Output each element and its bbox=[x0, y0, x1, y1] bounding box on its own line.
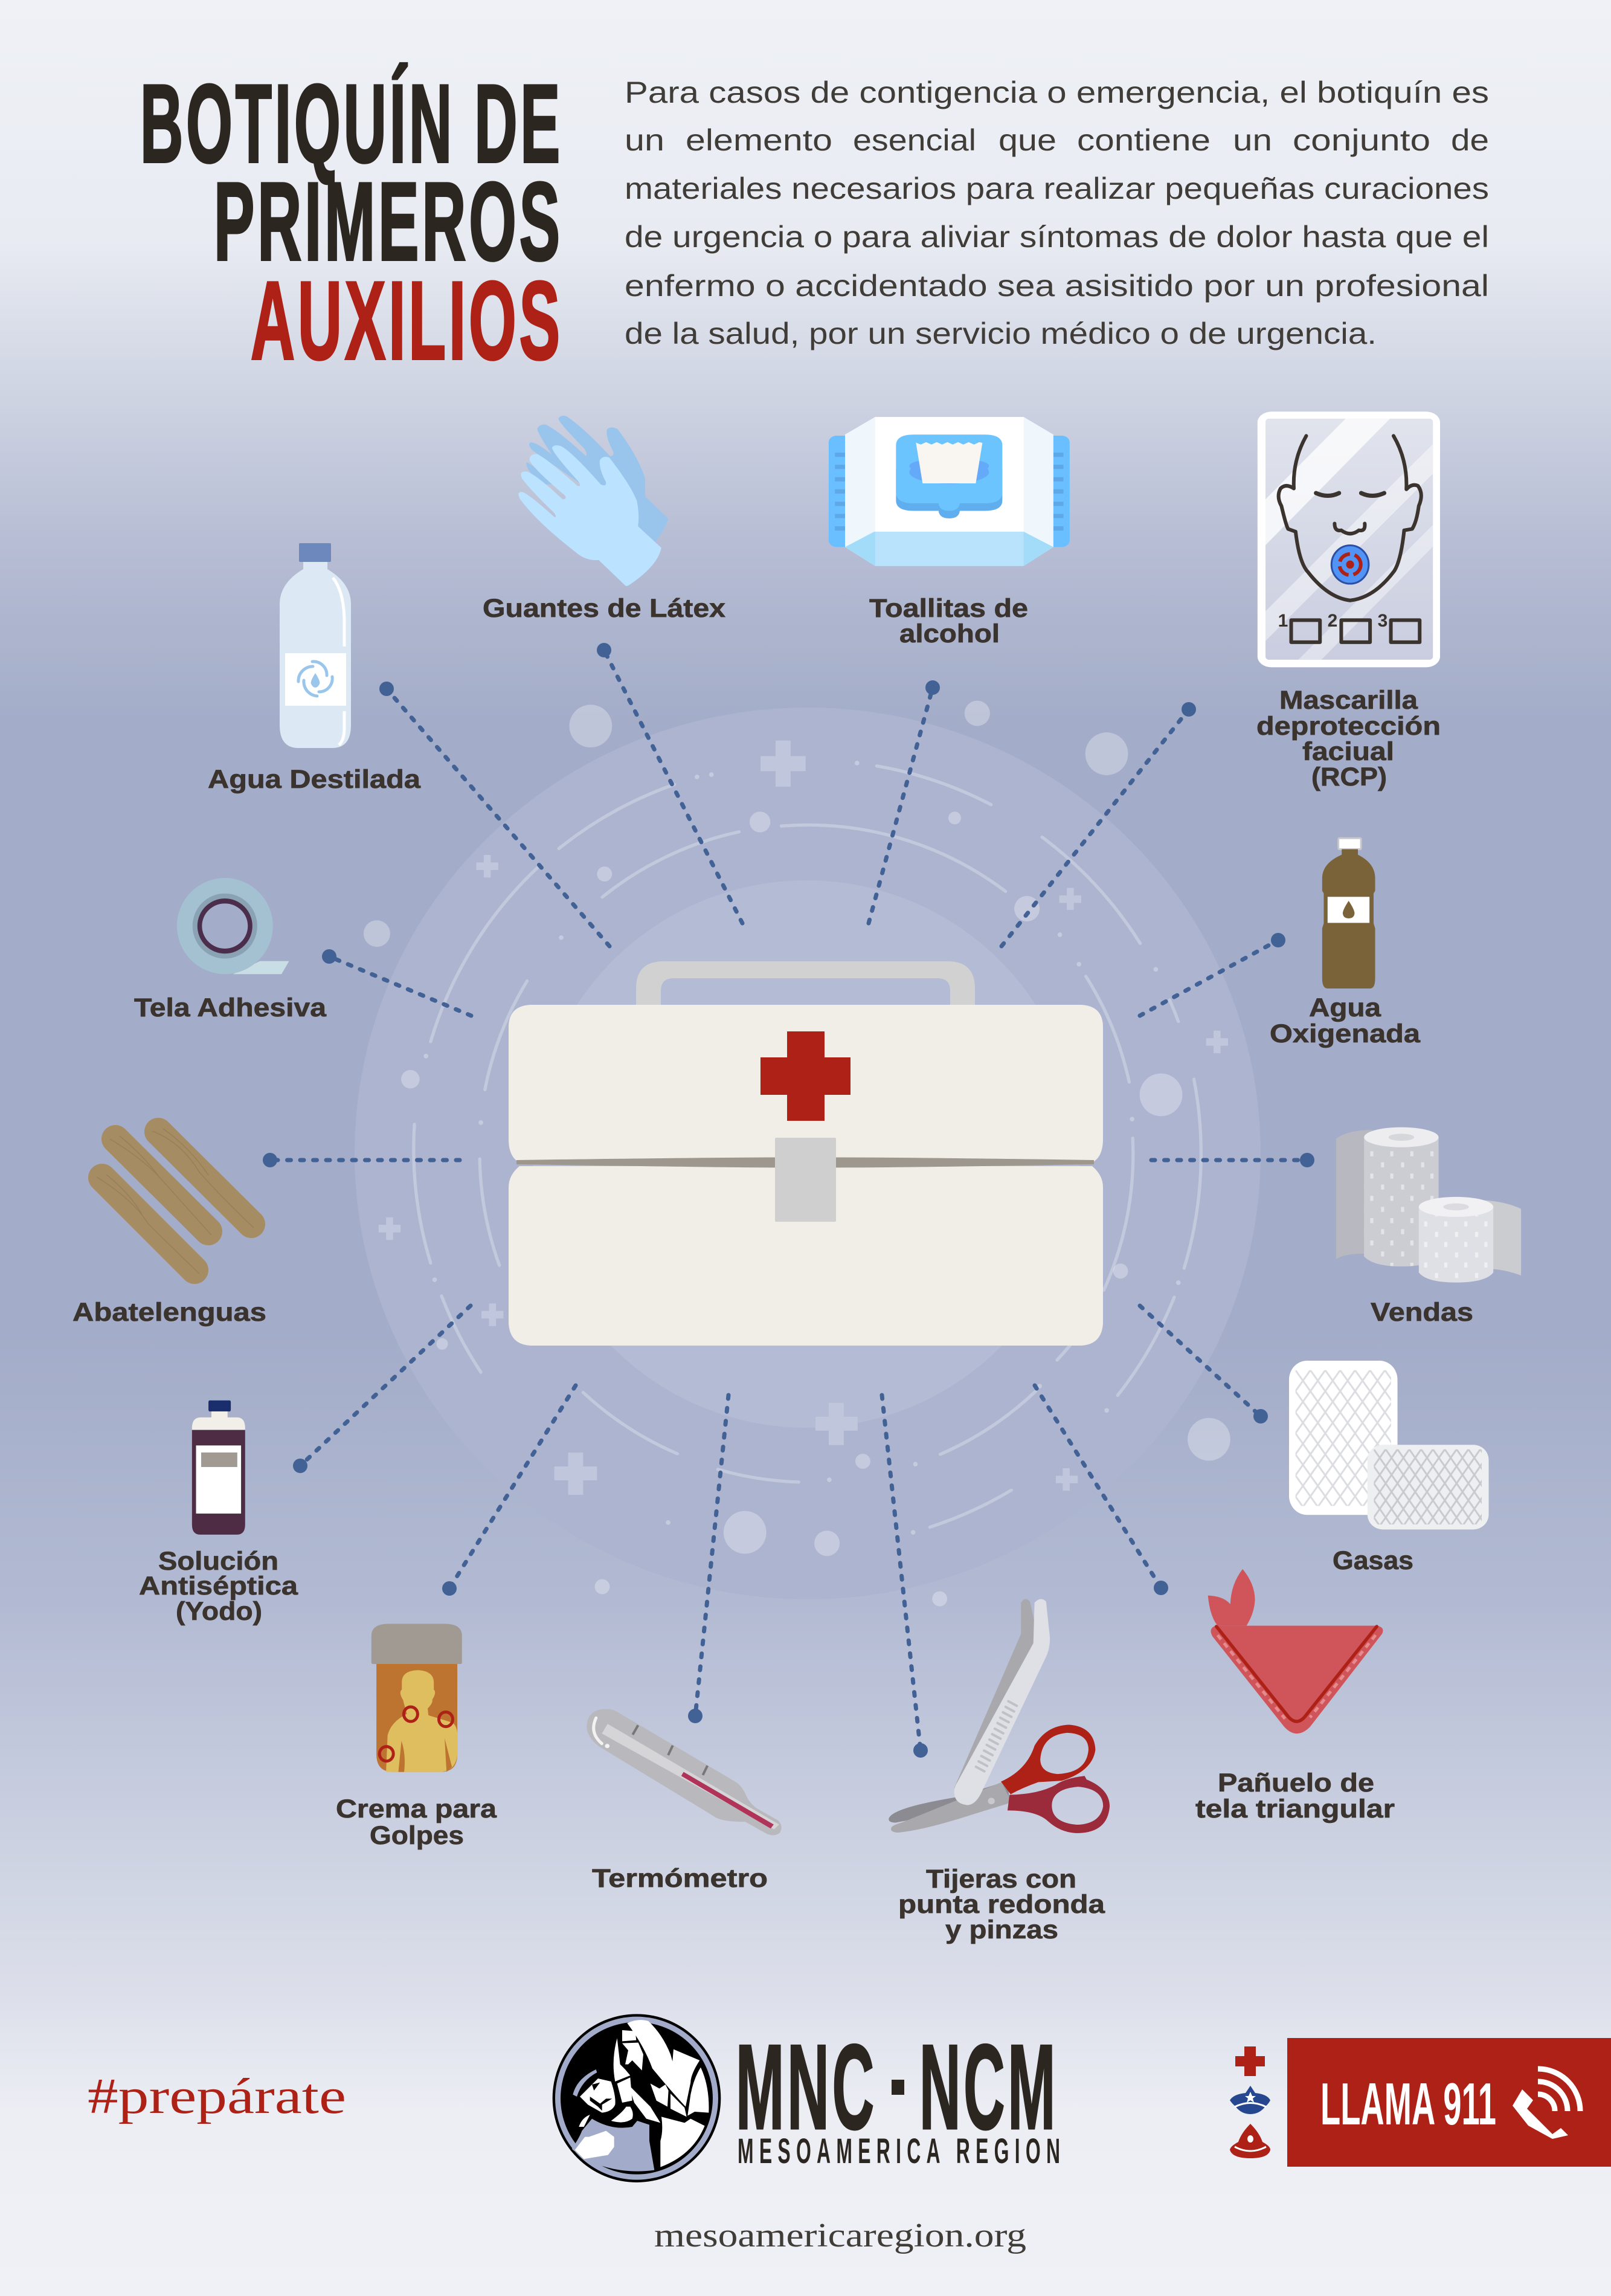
scissors lower handle bbox=[1008, 1776, 1110, 1833]
label: Mascarilla: deprotección bbox=[1256, 712, 1441, 741]
kit seam bbox=[516, 1158, 1094, 1167]
label: Tijeras con punta redonda y pinzas bbox=[898, 1865, 1105, 1944]
kit red cross bbox=[760, 1031, 851, 1121]
label: Solución Antiséptica (Yodo): Antiséptica bbox=[139, 1572, 298, 1601]
icon: antiseptic bottle bbox=[192, 1401, 245, 1535]
label: Toallitas de alcohol: alcohol bbox=[899, 619, 1000, 648]
logo emblem bbox=[553, 2014, 721, 2182]
label: Tijeras con punta redonda y pinzas: y pinzas bbox=[945, 1915, 1058, 1944]
title bbox=[140, 61, 563, 382]
leader: Tijeras bbox=[882, 1395, 928, 1758]
leader: Mascarilla bbox=[1002, 702, 1196, 946]
tweezers bbox=[954, 1599, 1050, 1805]
intro paragraph: elemento bbox=[686, 123, 832, 157]
icon: CPR face shield bbox=[1258, 411, 1440, 667]
intro paragraph: materiales necesarios para realizar pequeñas curaciones bbox=[625, 172, 1489, 205]
leader: Termómetro bbox=[688, 1395, 728, 1723]
label: Guantes de Látex: Guantes de Látex bbox=[483, 594, 725, 623]
leader: Pañuelo bbox=[1035, 1385, 1168, 1595]
icon: phone signal bbox=[1513, 2069, 1580, 2139]
intro paragraph: contiene bbox=[1077, 123, 1211, 157]
icon: ointment jar bbox=[371, 1624, 462, 1772]
scissors upper handle bbox=[1001, 1724, 1095, 1795]
kit lower body bbox=[509, 1166, 1103, 1346]
leader: Guantes de Látex bbox=[597, 643, 742, 923]
label: Mascarilla bbox=[1256, 686, 1441, 792]
label: Toallitas de alcohol: Toallitas de bbox=[869, 594, 1028, 623]
leader: Gasas bbox=[1140, 1306, 1268, 1424]
kit clasp bbox=[775, 1138, 836, 1222]
leader: Solución Antiséptica bbox=[293, 1306, 471, 1473]
label: Mascarilla: faciual bbox=[1302, 737, 1394, 766]
label: Tijeras con punta redonda y pinzas: punta redonda bbox=[898, 1890, 1105, 1919]
scissors blades bbox=[889, 1781, 1010, 1833]
label: Gasas: Gasas bbox=[1333, 1546, 1413, 1575]
label: Mascarilla: (RCP) bbox=[1311, 763, 1387, 792]
call 911 banner bbox=[1287, 2038, 1611, 2167]
label: Toallitas de alcohol bbox=[869, 594, 1028, 648]
intro paragraph: un bbox=[625, 123, 664, 157]
icon: gauze pads bbox=[1289, 1361, 1489, 1529]
icon: CPR face shield: 3 bbox=[1378, 611, 1388, 631]
hashtag: #prepárate bbox=[88, 2068, 346, 2124]
leader: Crema para Golpes bbox=[442, 1385, 576, 1596]
label: Tijeras con punta redonda y pinzas: Tijeras con bbox=[926, 1865, 1076, 1894]
leader: Agua Oxigenada bbox=[1140, 933, 1285, 1016]
icon: alcohol wipes bbox=[829, 417, 1070, 566]
icon: CPR face shield: 2 bbox=[1328, 611, 1337, 631]
logo wordmark: MNC bbox=[736, 2020, 877, 2155]
label: Crema para Golpes: Crema para bbox=[336, 1795, 497, 1824]
label: Pañuelo de tela triangular: Pañuelo de bbox=[1218, 1769, 1374, 1798]
icon: latex gloves bbox=[518, 416, 669, 586]
label: Agua Destilada: Agua Destilada bbox=[208, 765, 421, 794]
label: Agua Oxigenada bbox=[1270, 993, 1421, 1048]
icon: bandage rolls bbox=[1336, 1127, 1521, 1283]
kit handle bbox=[636, 961, 975, 1009]
website: mesoamericaregion.org bbox=[654, 2217, 1026, 2254]
icon: adhesive tape roll bbox=[177, 878, 289, 974]
icon: police cap bbox=[1230, 2086, 1270, 2114]
intro paragraph: conjunto bbox=[1293, 123, 1430, 157]
leader: Agua Destilada bbox=[379, 682, 609, 946]
icon: water bottle bbox=[280, 543, 351, 748]
icon: thermometer bbox=[587, 1709, 782, 1835]
intro paragraph: de urgencia o para aliviar síntomas de dolor hasta que el bbox=[625, 220, 1489, 254]
label: Agua Oxigenada: Oxigenada bbox=[1270, 1019, 1421, 1048]
icon: tongue depressors bbox=[97, 1129, 254, 1274]
kit upper lid bbox=[509, 1005, 1103, 1163]
central radial circles bbox=[355, 708, 1261, 1599]
label: Mascarilla: Mascarilla bbox=[1279, 686, 1418, 715]
label: Vendas: Vendas bbox=[1371, 1298, 1473, 1327]
intro paragraph: esencial bbox=[853, 123, 976, 157]
intro paragraph: de la salud, por un servicio médico o de urgencia. bbox=[625, 317, 1377, 350]
title: BOTIQUÍN DE bbox=[140, 61, 563, 185]
logo wordmark: MESOAMERICA REGION bbox=[738, 2132, 1060, 2170]
intro paragraph: un bbox=[1233, 123, 1272, 157]
intro paragraph: de bbox=[1451, 123, 1489, 157]
label: Solución Antiséptica (Yodo): Solución bbox=[158, 1547, 278, 1576]
label: Pañuelo de tela triangular: tela triangular bbox=[1195, 1795, 1395, 1824]
leader: Tela Adhesiva bbox=[322, 949, 471, 1016]
icon: firefighter helmet bbox=[1230, 2124, 1270, 2158]
intro paragraph bbox=[625, 76, 1489, 350]
intro paragraph: enfermo o accidentado sea asisitido por un profesional bbox=[625, 269, 1489, 303]
icon: triangular bandage bbox=[1208, 1569, 1383, 1733]
leader: Abatelenguas bbox=[263, 1153, 460, 1167]
infographic canvas: NCM bbox=[919, 2020, 1058, 2155]
label: Termómetro: Termómetro bbox=[592, 1864, 768, 1893]
label: Tela Adhesiva: Tela Adhesiva bbox=[134, 993, 327, 1022]
decorative arcs, dots and crosses bbox=[364, 701, 1230, 1607]
first aid kit bbox=[509, 961, 1103, 1346]
title: AUXILIOS bbox=[251, 258, 563, 382]
leader: Toallitas de alcohol bbox=[869, 680, 940, 923]
icon: CPR face shield: 1 bbox=[1278, 611, 1288, 631]
intro paragraph: que bbox=[998, 123, 1056, 157]
leader: Vendas bbox=[1151, 1153, 1314, 1167]
label: Agua Oxigenada: Agua bbox=[1309, 993, 1381, 1022]
label: Crema para Golpes bbox=[336, 1795, 497, 1850]
intro paragraph: Para casos de contigencia o emergencia, el botiquín es bbox=[625, 76, 1489, 109]
label: Solución Antiséptica (Yodo) bbox=[139, 1547, 298, 1626]
icon: scissors and tweezers bbox=[889, 1599, 1110, 1833]
icon: hydrogen peroxide bottle bbox=[1322, 838, 1375, 988]
title: PRIMEROS bbox=[214, 159, 563, 283]
label: Pañuelo de tela triangular bbox=[1195, 1769, 1395, 1824]
icon: red cross bbox=[1235, 2046, 1265, 2076]
label: Abatelenguas: Abatelenguas bbox=[72, 1298, 266, 1327]
label: Crema para Golpes: Golpes bbox=[370, 1821, 464, 1850]
label: Solución Antiséptica (Yodo): (Yodo) bbox=[176, 1597, 262, 1626]
